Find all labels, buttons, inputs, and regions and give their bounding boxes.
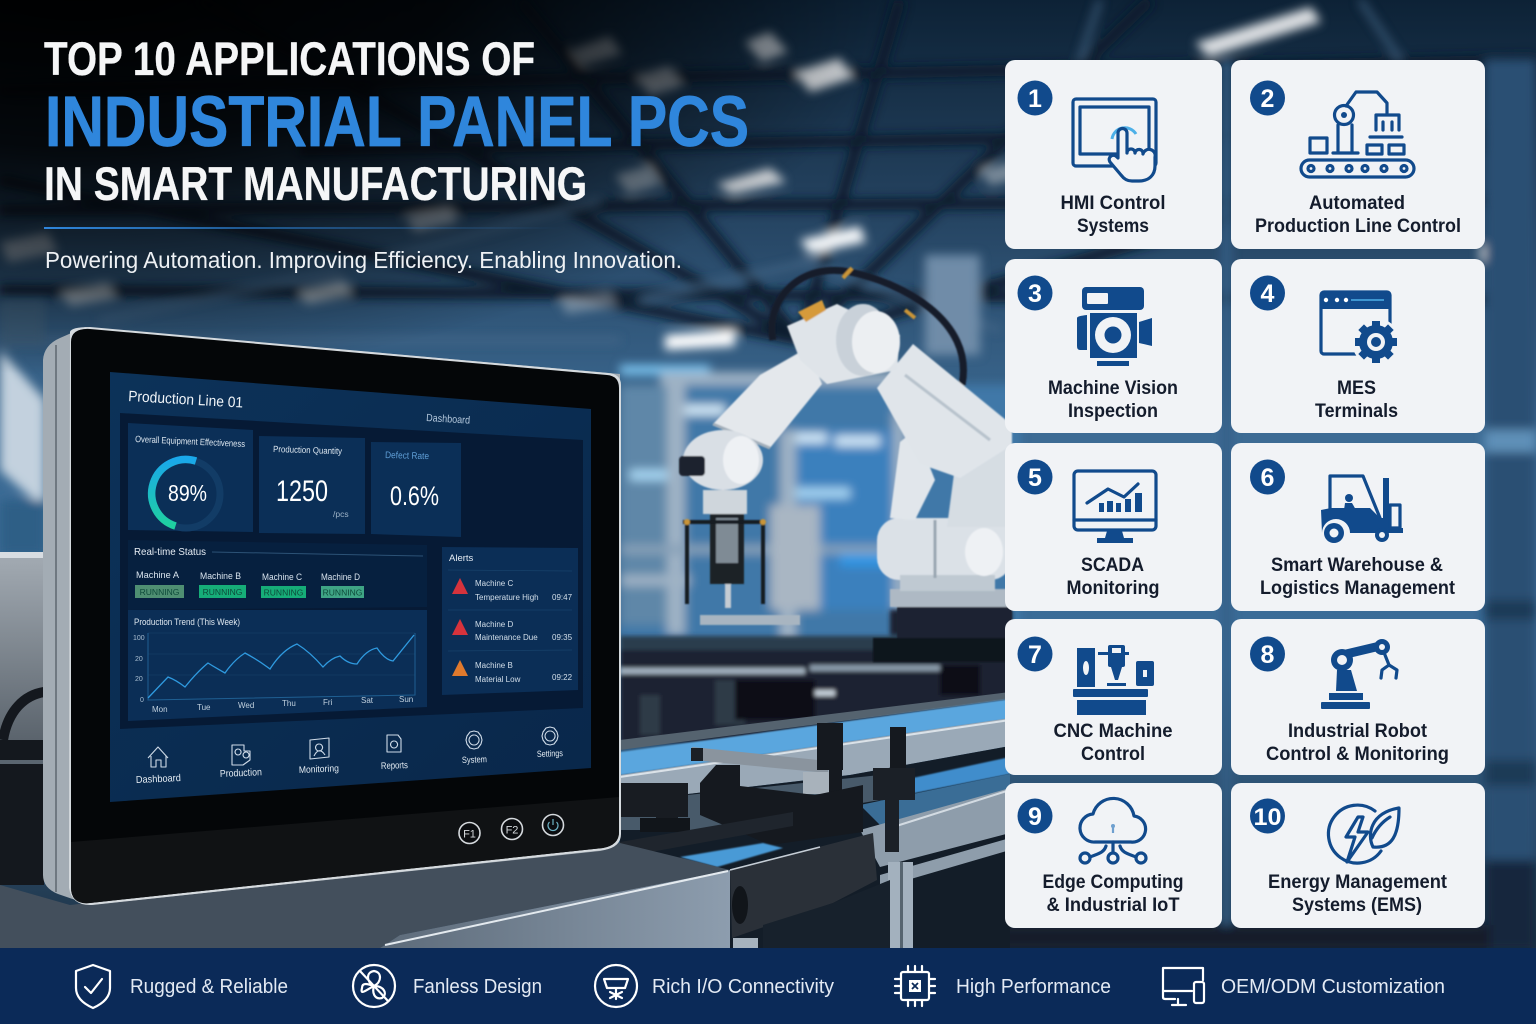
feature: customization [1163, 968, 1445, 1005]
black bezel [71, 329, 619, 903]
label 2 [1255, 193, 1461, 237]
cables [772, 270, 963, 385]
label 10: Systems (EMS) [1292, 895, 1422, 916]
label 6: Smart Warehouse & [1271, 555, 1443, 576]
production quantity card [259, 436, 365, 534]
card 1: HMI [1005, 60, 1222, 249]
production trend chart: Sat [361, 696, 374, 705]
lower rails [860, 788, 1010, 867]
nav icon: production [232, 745, 250, 765]
production trend chart: 100 [133, 635, 145, 642]
rear rail [620, 692, 1010, 750]
conveyor machinery [620, 610, 1012, 948]
label 8: Control & Monitoring [1266, 744, 1449, 765]
real-time status: RUNNING [140, 587, 179, 597]
production quantity card: Production Quantity [273, 444, 343, 456]
production trend chart: Fri [323, 698, 333, 707]
silver table top [0, 552, 748, 948]
card 10: energy [1231, 783, 1485, 928]
production trend chart: Tue [197, 703, 211, 712]
nav icon: settings [542, 727, 558, 745]
real-time status: Machine A [136, 570, 180, 581]
alerts panel [442, 547, 578, 695]
label 3 [1048, 378, 1178, 422]
label 2: Automated [1309, 193, 1405, 214]
title darkening [0, 0, 1536, 400]
label 10: Energy Management [1268, 872, 1448, 893]
badge 1 [1018, 80, 1052, 116]
tagline: Powering Automation. Improving Efficiency. Enabling Innovation. [45, 247, 682, 273]
real-time status: Real-time Status [134, 546, 206, 558]
alerts panel: 09:22 [552, 673, 573, 682]
feature: I/O [595, 965, 834, 1007]
feature: fanless: Fanless Design [413, 976, 542, 998]
badge 7 [1018, 636, 1052, 672]
icon: monitor chart [1074, 471, 1156, 543]
label 2: Production Line Control [1255, 216, 1461, 237]
label 1: Systems [1077, 216, 1149, 237]
alerts panel: Machine B [475, 661, 513, 670]
label 3: Inspection [1068, 401, 1158, 422]
badge 3 [1018, 276, 1052, 310]
badge 3: 3 [1028, 280, 1042, 308]
real-time status [128, 540, 427, 610]
alerts panel: Alerts [449, 553, 474, 564]
left machine [0, 557, 44, 742]
nav icon: dashboard [148, 747, 168, 767]
badge 9 [1018, 798, 1052, 834]
ball screw [620, 812, 793, 856]
badge 5 [1018, 460, 1052, 494]
production trend chart: 20 [135, 656, 143, 663]
icon: camera [1077, 287, 1152, 366]
OEE card: Overall Equipment Effectiveness [135, 434, 246, 449]
feature: rugged [76, 965, 288, 1008]
alerts panel: Material Low [475, 675, 521, 684]
icon: cloud network [1080, 798, 1146, 863]
badge 1: 1 [1028, 85, 1042, 113]
lower arm column [947, 428, 1012, 527]
right edge strip [1485, 60, 1536, 948]
card 2: production line [1231, 60, 1485, 249]
alerts panel: Temperature High [475, 593, 539, 602]
left blurred robot [0, 300, 45, 555]
badge 4: 4 [1261, 280, 1275, 308]
machines behind belt [620, 610, 1012, 743]
label 4: MES [1337, 378, 1376, 399]
icon: window and gear [1321, 292, 1400, 366]
nav icon: monitoring [310, 738, 329, 759]
label 5: SCADA [1081, 555, 1144, 576]
screen [110, 372, 591, 802]
card 3: machine vision [1005, 259, 1222, 433]
feature: performance [895, 966, 1111, 1006]
black side plate [730, 833, 877, 938]
nav icon: system [466, 731, 482, 749]
label 9: & Industrial IoT [1046, 895, 1180, 916]
upper arm [713, 348, 822, 448]
badge 10: 10 [1254, 804, 1282, 831]
alerts panel: Machine C [475, 579, 513, 588]
bottom navigation: Reports [381, 760, 408, 772]
title [44, 32, 749, 210]
card 9: edge computing [1005, 783, 1222, 928]
label 8 [1266, 721, 1449, 765]
production quantity card: 1250 [276, 475, 328, 508]
real-time status: RUNNING [323, 588, 362, 598]
feature: performance: High Performance [956, 976, 1111, 998]
base plates [873, 638, 1012, 662]
feature: I/O: Rich I/O Connectivity [652, 976, 834, 998]
black blocks [700, 765, 863, 845]
real-time status: Machine B [200, 571, 241, 582]
badge 6: 6 [1261, 464, 1274, 492]
card 7: CNC [1005, 619, 1222, 775]
label 10 [1268, 872, 1448, 916]
production trend chart: Wed [238, 701, 254, 710]
wrist [683, 430, 763, 490]
feature: rugged: Rugged & Reliable [130, 976, 288, 998]
screen dashboard tab: Dashboard [426, 412, 471, 427]
chin [71, 797, 619, 903]
real-time status: Machine C [262, 572, 302, 583]
label 9: Edge Computing [1042, 872, 1184, 893]
badge 10 [1250, 798, 1285, 834]
label 5 [1066, 555, 1160, 599]
bottom navigation: Dashboard [136, 773, 181, 786]
bottom navigation: Production [220, 767, 262, 780]
alerts panel: Machine D [475, 620, 513, 629]
card 8: robot [1231, 619, 1485, 775]
defect rate card: Defect Rate [385, 450, 429, 462]
label 8: Industrial Robot [1288, 721, 1428, 742]
alerts panel: Maintenance Due [475, 633, 538, 642]
front rail [620, 718, 1010, 802]
frame column [888, 862, 913, 948]
hardware buttons: F2 [506, 824, 518, 836]
far bright windows [620, 385, 1020, 650]
label 7: Control [1081, 744, 1145, 765]
label 4 [1315, 378, 1398, 422]
label 1: HMI Control [1060, 193, 1166, 214]
icon: CNC machine [1073, 645, 1154, 715]
blue belt [620, 699, 1010, 775]
label 9 [1042, 872, 1184, 916]
production trend chart: Thu [282, 699, 296, 708]
card 6: warehouse [1231, 443, 1485, 611]
label 6 [1260, 555, 1456, 599]
label 6: Logistics Management [1260, 578, 1456, 599]
nav icon: reports [387, 735, 401, 752]
feature: fanless [353, 965, 542, 1007]
production trend chart: 20 [135, 676, 143, 683]
alerts panel: 09:47 [552, 593, 573, 602]
panel pc monitor [43, 327, 621, 905]
bottom feature bar [0, 948, 1536, 1024]
OEE card [128, 423, 253, 532]
title line 2: INDUSTRIAL PANEL PCS [45, 83, 749, 162]
production trend chart [128, 610, 427, 721]
badge 9: 9 [1028, 803, 1042, 831]
OEE card: 89% [168, 480, 207, 506]
production trend chart: Sun [399, 695, 413, 704]
real-time status: RUNNING [203, 587, 242, 597]
bottom navigation: Settings [537, 748, 563, 759]
label 1 [1060, 193, 1166, 237]
production quantity card: /pcs [333, 509, 349, 519]
production trend chart: Mon [152, 705, 168, 714]
base body [877, 518, 1012, 580]
feature: customization: OEM/ODM Customization [1221, 976, 1445, 998]
bottom navigation: Monitoring [299, 763, 339, 776]
icon: robot arm [1321, 639, 1397, 709]
lower open area [620, 746, 1010, 948]
real-time status: RUNNING [264, 588, 303, 598]
real-time status: Machine D [321, 572, 360, 583]
clamp bar [692, 747, 828, 773]
title line 1: TOP 10 APPLICATIONS OF [44, 32, 535, 85]
defect rate card [371, 442, 461, 537]
tool [703, 490, 747, 514]
defect rate card: 0.6% [390, 481, 439, 511]
icon: energy leaf [1328, 805, 1399, 863]
screen title: Production Line 01 [128, 388, 244, 412]
label 3: Machine Vision [1048, 378, 1178, 399]
badge 2 [1250, 80, 1285, 116]
lower blue belt [680, 843, 783, 867]
badge 5: 5 [1028, 464, 1042, 492]
hardware buttons [459, 814, 564, 844]
silver frame [43, 327, 620, 905]
title line 3: IN SMART MANUFACTURING [44, 157, 587, 210]
icon: forklift [1321, 476, 1403, 543]
label 4: Terminals [1315, 401, 1398, 422]
icon: conveyor robot [1301, 92, 1414, 177]
badge 2: 2 [1261, 85, 1274, 113]
alerts panel: 09:35 [552, 633, 573, 642]
badge 6 [1250, 460, 1285, 494]
badge 7: 7 [1028, 641, 1042, 669]
badge 8 [1250, 636, 1285, 672]
icon: touch screen [1073, 99, 1156, 181]
card 5: SCADA [1005, 443, 1222, 611]
production trend chart: 0 [140, 697, 144, 704]
bottom navigation [136, 727, 563, 786]
hardware buttons: F1 [463, 828, 476, 840]
label 5: Monitoring [1066, 578, 1160, 599]
robot arm [679, 268, 1012, 662]
card 4: MES [1231, 259, 1485, 433]
label 7 [1054, 721, 1172, 765]
shoulder [787, 304, 900, 384]
production trend chart: Production Trend (This Week) [134, 617, 240, 628]
badge 4 [1250, 276, 1285, 310]
label 7: CNC Machine [1054, 721, 1172, 742]
bottom navigation: System [462, 754, 487, 765]
badge 8: 8 [1261, 641, 1275, 669]
